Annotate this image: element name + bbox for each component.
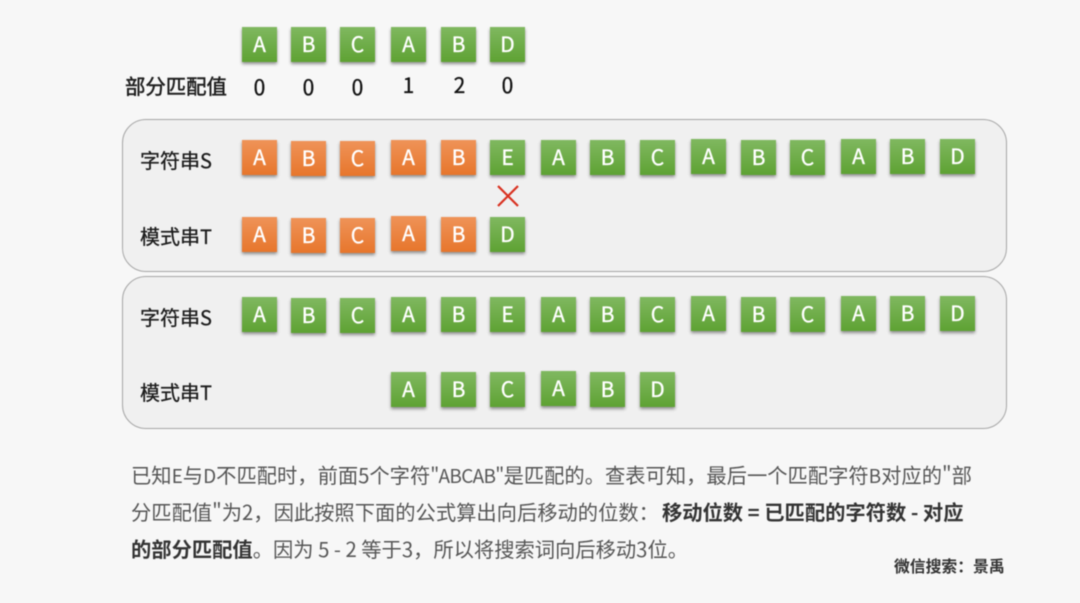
pattern T tiles, first panel: D bbox=[500, 219, 515, 249]
partial match values: 0 bbox=[303, 72, 314, 102]
string S tiles, second panel: B bbox=[901, 298, 914, 328]
string S tiles, first panel: C bbox=[651, 142, 664, 172]
pattern string tiles: D bbox=[500, 29, 515, 59]
string S tiles, first panel: B bbox=[901, 141, 914, 171]
pattern T tiles, first panel bbox=[240, 215, 528, 258]
string S tiles, first panel: A bbox=[253, 142, 266, 172]
string S tiles, second panel: A bbox=[253, 299, 266, 329]
pattern T tiles, first panel: B bbox=[302, 220, 315, 250]
pattern T tiles, second panel: C bbox=[501, 374, 514, 404]
panel: mismatch step bbox=[122, 119, 1007, 272]
pattern T tiles, second panel: B bbox=[601, 374, 614, 404]
pattern string tiles: A bbox=[402, 29, 415, 59]
watermark credit: 微信搜索：景禹 bbox=[894, 554, 1005, 577]
string S tiles, first panel: A bbox=[402, 142, 415, 172]
explanation text: 分匹配值"为2，因此按照下面的公式算出向后移动的位数：移动位数 = 已匹配的字符数 - 对应 bbox=[131, 496, 964, 526]
pattern T tiles, second panel: A bbox=[552, 373, 565, 403]
icon: red mismatch cross bbox=[496, 184, 520, 208]
string S tiles, second panel: B bbox=[752, 299, 765, 329]
explanation text: 已知E与D不匹配时，前面5个字符"ABCAB"是匹配的。查表可知，最后一个匹配字符B对应的"部 bbox=[131, 459, 972, 489]
string S tiles, second panel: C bbox=[801, 299, 814, 329]
partial match values: 0 bbox=[254, 72, 265, 102]
partial match values: 0 bbox=[502, 70, 513, 100]
pattern string tiles: B bbox=[302, 29, 315, 59]
pattern T tiles, first panel: B bbox=[452, 219, 465, 249]
label: pattern T: 模式串T bbox=[140, 221, 212, 250]
string S tiles, second panel: B bbox=[452, 299, 465, 329]
pattern T tiles, second panel bbox=[388, 370, 678, 412]
partial match values bbox=[254, 70, 514, 102]
string S tiles, first panel: B bbox=[302, 143, 315, 173]
pattern T tiles, second panel: D bbox=[650, 374, 665, 404]
string S tiles, second panel: A bbox=[402, 299, 415, 329]
pattern T tiles, first panel: C bbox=[351, 220, 364, 250]
string S tiles, first panel: B bbox=[752, 142, 765, 172]
pattern string tiles: C bbox=[351, 29, 364, 59]
string S tiles, second panel: C bbox=[651, 299, 664, 329]
partial match values: 2 bbox=[454, 70, 465, 100]
partial match values: 0 bbox=[352, 72, 363, 102]
string S tiles, second panel: C bbox=[351, 300, 364, 330]
string S tiles, second panel: A bbox=[702, 298, 715, 328]
string S tiles, first panel: A bbox=[552, 142, 565, 172]
string S tiles, second panel: E bbox=[501, 299, 514, 329]
explanation text bbox=[131, 459, 972, 563]
string S tiles, first panel: B bbox=[601, 142, 614, 172]
string S tiles, first panel: A bbox=[852, 141, 865, 171]
label: string S: 字符串S bbox=[140, 145, 212, 174]
label: pattern T: 模式串T bbox=[140, 377, 212, 406]
string S tiles, first panel: E bbox=[501, 142, 514, 172]
string S tiles, first panel bbox=[240, 138, 978, 180]
string S tiles, first panel: C bbox=[351, 143, 364, 173]
pattern T tiles, first panel: A bbox=[253, 219, 266, 249]
string S tiles, second panel: B bbox=[601, 299, 614, 329]
pattern T tiles, second panel: B bbox=[452, 374, 465, 404]
partial match values: 1 bbox=[403, 70, 414, 100]
string S tiles, first panel: C bbox=[801, 142, 814, 172]
pattern T tiles, first panel: A bbox=[402, 218, 415, 248]
string S tiles, second panel: A bbox=[552, 299, 565, 329]
string S tiles, first panel: B bbox=[452, 142, 465, 172]
explanation text: 的部分匹配值。因为 5 - 2 等于3，所以将搜索词向后移动3位。 bbox=[131, 533, 688, 563]
string S tiles, first panel: D bbox=[950, 141, 965, 171]
pattern string tiles: B bbox=[452, 29, 465, 59]
label: string S: 字符串S bbox=[140, 302, 212, 331]
string S tiles, first panel: A bbox=[702, 141, 715, 171]
pattern T tiles, second panel: A bbox=[402, 374, 415, 404]
partial match table label: 部分匹配值 bbox=[125, 70, 227, 100]
string S tiles, second panel: B bbox=[302, 300, 315, 330]
pattern string tiles: A bbox=[253, 29, 266, 59]
string S tiles, second panel: D bbox=[950, 298, 965, 328]
string S tiles, second panel bbox=[240, 295, 978, 338]
panel: shifted step bbox=[122, 276, 1007, 429]
pattern string tiles bbox=[240, 26, 528, 66]
string S tiles, second panel: A bbox=[852, 298, 865, 328]
